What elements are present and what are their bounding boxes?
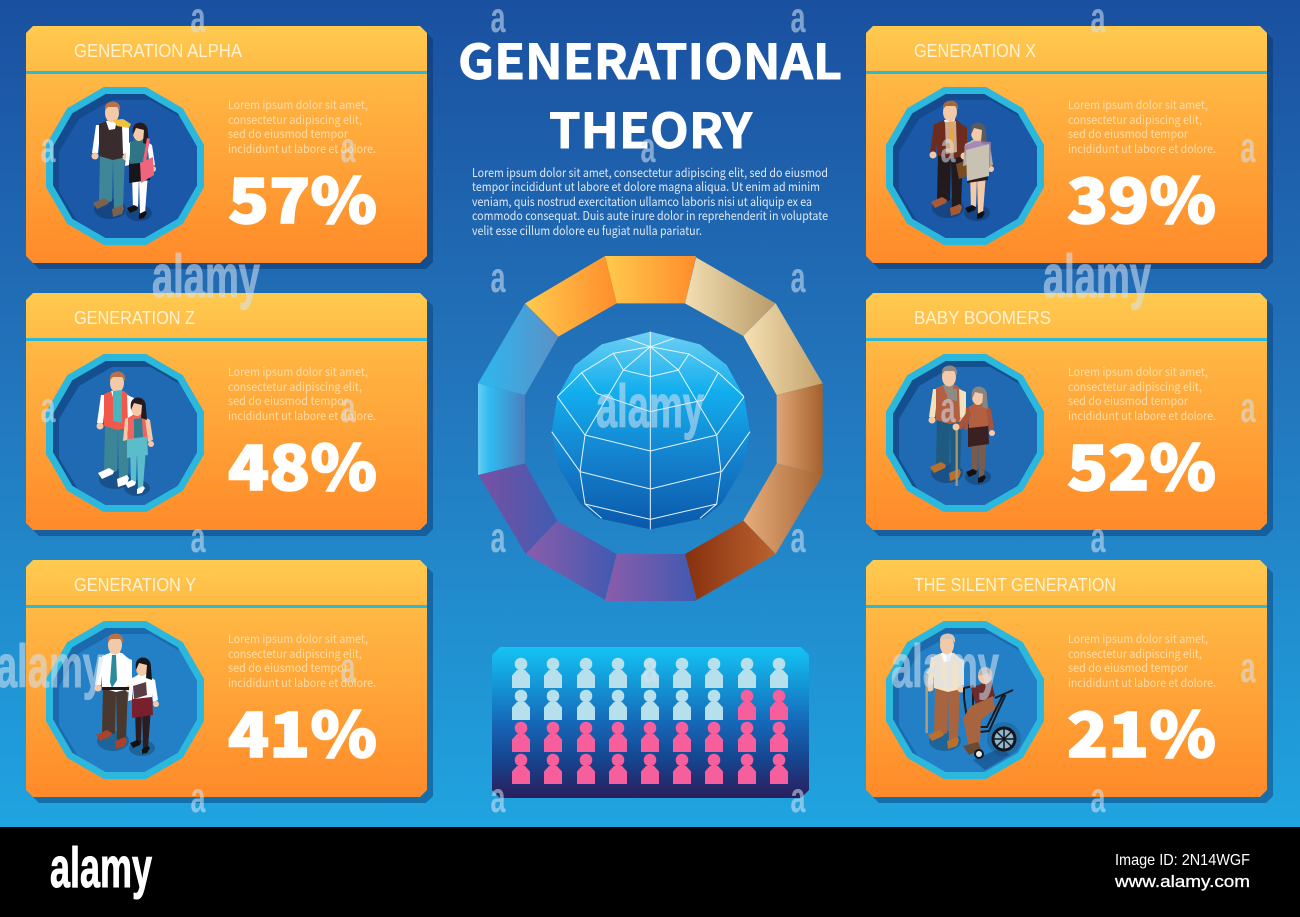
- heading: the silent generation: THE SILENT GENERATION: [914, 575, 1116, 595]
- stat: 21%: 21%: [1067, 685, 1216, 775]
- watermarks: a: [340, 384, 356, 432]
- stat: 48%: 48%: [228, 418, 377, 508]
- row 1: nine light figures: [512, 658, 788, 688]
- icon: wireframe globe: [552, 332, 750, 529]
- text: boomers description: consectetur adipiscing elit,: [1068, 379, 1202, 395]
- watermarks: a: [1090, 774, 1106, 822]
- text: intro paragraph: velit esse cillum dolore eu fugiat nulla pariatur.: [472, 222, 702, 239]
- text: alpha description: consectetur adipiscing elit,: [228, 112, 362, 128]
- text: silent description: sed do eiusmod tempor: [1068, 660, 1188, 676]
- heading: generation z: GENERATION Z: [74, 308, 195, 328]
- footer image id: Image ID: 2N14WGF: [1115, 852, 1250, 869]
- watermarks: a: [790, 774, 806, 822]
- text: silent description: [1068, 631, 1216, 691]
- watermarks: a: [40, 384, 56, 432]
- watermarks: a: [490, 774, 506, 822]
- text: x description: incididunt ut labore et dolore.: [1068, 141, 1216, 157]
- text: silent description: incididunt ut labore et dolore.: [1068, 675, 1216, 691]
- text: boomers description: incididunt ut labore et dolore.: [1068, 408, 1216, 424]
- text: x description: sed do eiusmod tempor: [1068, 126, 1188, 142]
- watermarks: a: [190, 514, 206, 562]
- watermarks: a: [642, 644, 658, 692]
- stat: 52%: 52%: [1067, 418, 1216, 508]
- title: [458, 23, 842, 162]
- panel: generation alpha: [26, 26, 433, 269]
- text: intro paragraph: [472, 164, 828, 239]
- stat: 41%: 41%: [228, 685, 377, 775]
- watermarks: a: [490, 254, 506, 302]
- text: silent description: Lorem ipsum dolor sit amet,: [1068, 631, 1208, 647]
- watermarks: alamy: [152, 243, 260, 310]
- footer logo: alamy: [50, 836, 152, 900]
- chart: people pictogram: [492, 647, 809, 798]
- panel: generation z: [26, 293, 433, 536]
- panel: baby boomers: [866, 293, 1273, 536]
- heading: generation x: GENERATION X: [914, 41, 1036, 61]
- text: x description: consectetur adipiscing elit,: [1068, 112, 1202, 128]
- text: z description: [228, 364, 376, 424]
- text: z description: Lorem ipsum dolor sit amet,: [228, 364, 368, 380]
- text: alpha description: Lorem ipsum dolor sit amet,: [228, 97, 368, 113]
- watermarks: a: [940, 384, 956, 432]
- icon: y couple: [46, 621, 204, 779]
- icon: z couple: [46, 354, 204, 512]
- text: intro paragraph: commodo consequat. Duis aute irure dolor in reprehenderit in voluptate: [472, 207, 828, 224]
- text: alpha description: sed do eiusmod tempor: [228, 126, 348, 142]
- rows 2 to 4: pink figures: [512, 690, 788, 784]
- text: intro paragraph: Lorem ipsum dolor sit amet, consectetur adipiscing elit, sed do eiusmod: [472, 164, 828, 181]
- text: y description: sed do eiusmod tempor: [228, 660, 348, 676]
- text: boomers description: Lorem ipsum dolor sit amet,: [1068, 364, 1208, 380]
- title: THEORY: [549, 92, 753, 162]
- icon: silent couple with wheelchair: [886, 621, 1044, 779]
- panel: generation x: [866, 26, 1273, 269]
- watermarks: a: [1240, 384, 1256, 432]
- watermarks: a: [1240, 644, 1256, 692]
- row 2: seven light figures: [512, 690, 723, 720]
- icon: boomer couple: [886, 354, 1044, 512]
- footer url: www.alamy.com: [1114, 872, 1250, 891]
- text: y description: consectetur adipiscing elit,: [228, 646, 362, 662]
- text: z description: incididunt ut labore et dolore.: [228, 408, 376, 424]
- text: x description: [1068, 97, 1216, 157]
- watermarks: a: [340, 644, 356, 692]
- watermarks: a: [340, 124, 356, 172]
- watermarks: a: [790, 254, 806, 302]
- text: z description: consectetur adipiscing elit,: [228, 379, 362, 395]
- title: GENERATIONAL: [458, 23, 842, 93]
- watermarks: a: [490, 514, 506, 562]
- chart: segmented ring: [478, 256, 823, 601]
- heading: baby boomers: BABY BOOMERS: [914, 308, 1051, 328]
- text: z description: sed do eiusmod tempor: [228, 393, 348, 409]
- text: x description: Lorem ipsum dolor sit amet,: [1068, 97, 1208, 113]
- text: boomers description: [1068, 364, 1216, 424]
- text: silent description: consectetur adipiscing elit,: [1068, 646, 1202, 662]
- text: intro paragraph: veniam, quis nostrud exercitation ullamco laboris nisi ut aliquip ex ea: [472, 193, 812, 210]
- stat: 57%: 57%: [228, 151, 377, 241]
- watermarks: alamy: [0, 633, 104, 700]
- text: boomers description: sed do eiusmod tempor: [1068, 393, 1188, 409]
- watermarks: a: [40, 124, 56, 172]
- heading: generation alpha: GENERATION ALPHA: [74, 41, 242, 61]
- heading: generation y: GENERATION Y: [74, 575, 196, 595]
- text: y description: Lorem ipsum dolor sit amet,: [228, 631, 368, 647]
- watermarks: alamy: [596, 373, 704, 440]
- panel: generation y: [26, 560, 433, 803]
- watermarks: a: [1090, 514, 1106, 562]
- text: intro paragraph: tempor incididunt ut labore et dolore magna aliqua. Ut enim ad minim: [472, 178, 820, 195]
- icon: alpha couple: [46, 87, 204, 245]
- watermarks: a: [940, 124, 956, 172]
- watermarks: a: [790, 514, 806, 562]
- panel: the silent generation: [866, 560, 1273, 803]
- watermarks: a: [640, 124, 656, 172]
- stat: 39%: 39%: [1067, 151, 1216, 241]
- footer bar: [0, 827, 1300, 917]
- text: y description: incididunt ut labore et dolore.: [228, 675, 376, 691]
- watermarks: alamy: [1043, 243, 1151, 310]
- icon: x couple: [886, 87, 1044, 245]
- watermarks: a: [190, 774, 206, 822]
- text: y description: [228, 631, 376, 691]
- watermarks: alamy: [891, 633, 999, 700]
- watermarks: a: [1240, 124, 1256, 172]
- text: alpha description: [228, 97, 376, 157]
- text: alpha description: incididunt ut labore et dolore.: [228, 141, 376, 157]
